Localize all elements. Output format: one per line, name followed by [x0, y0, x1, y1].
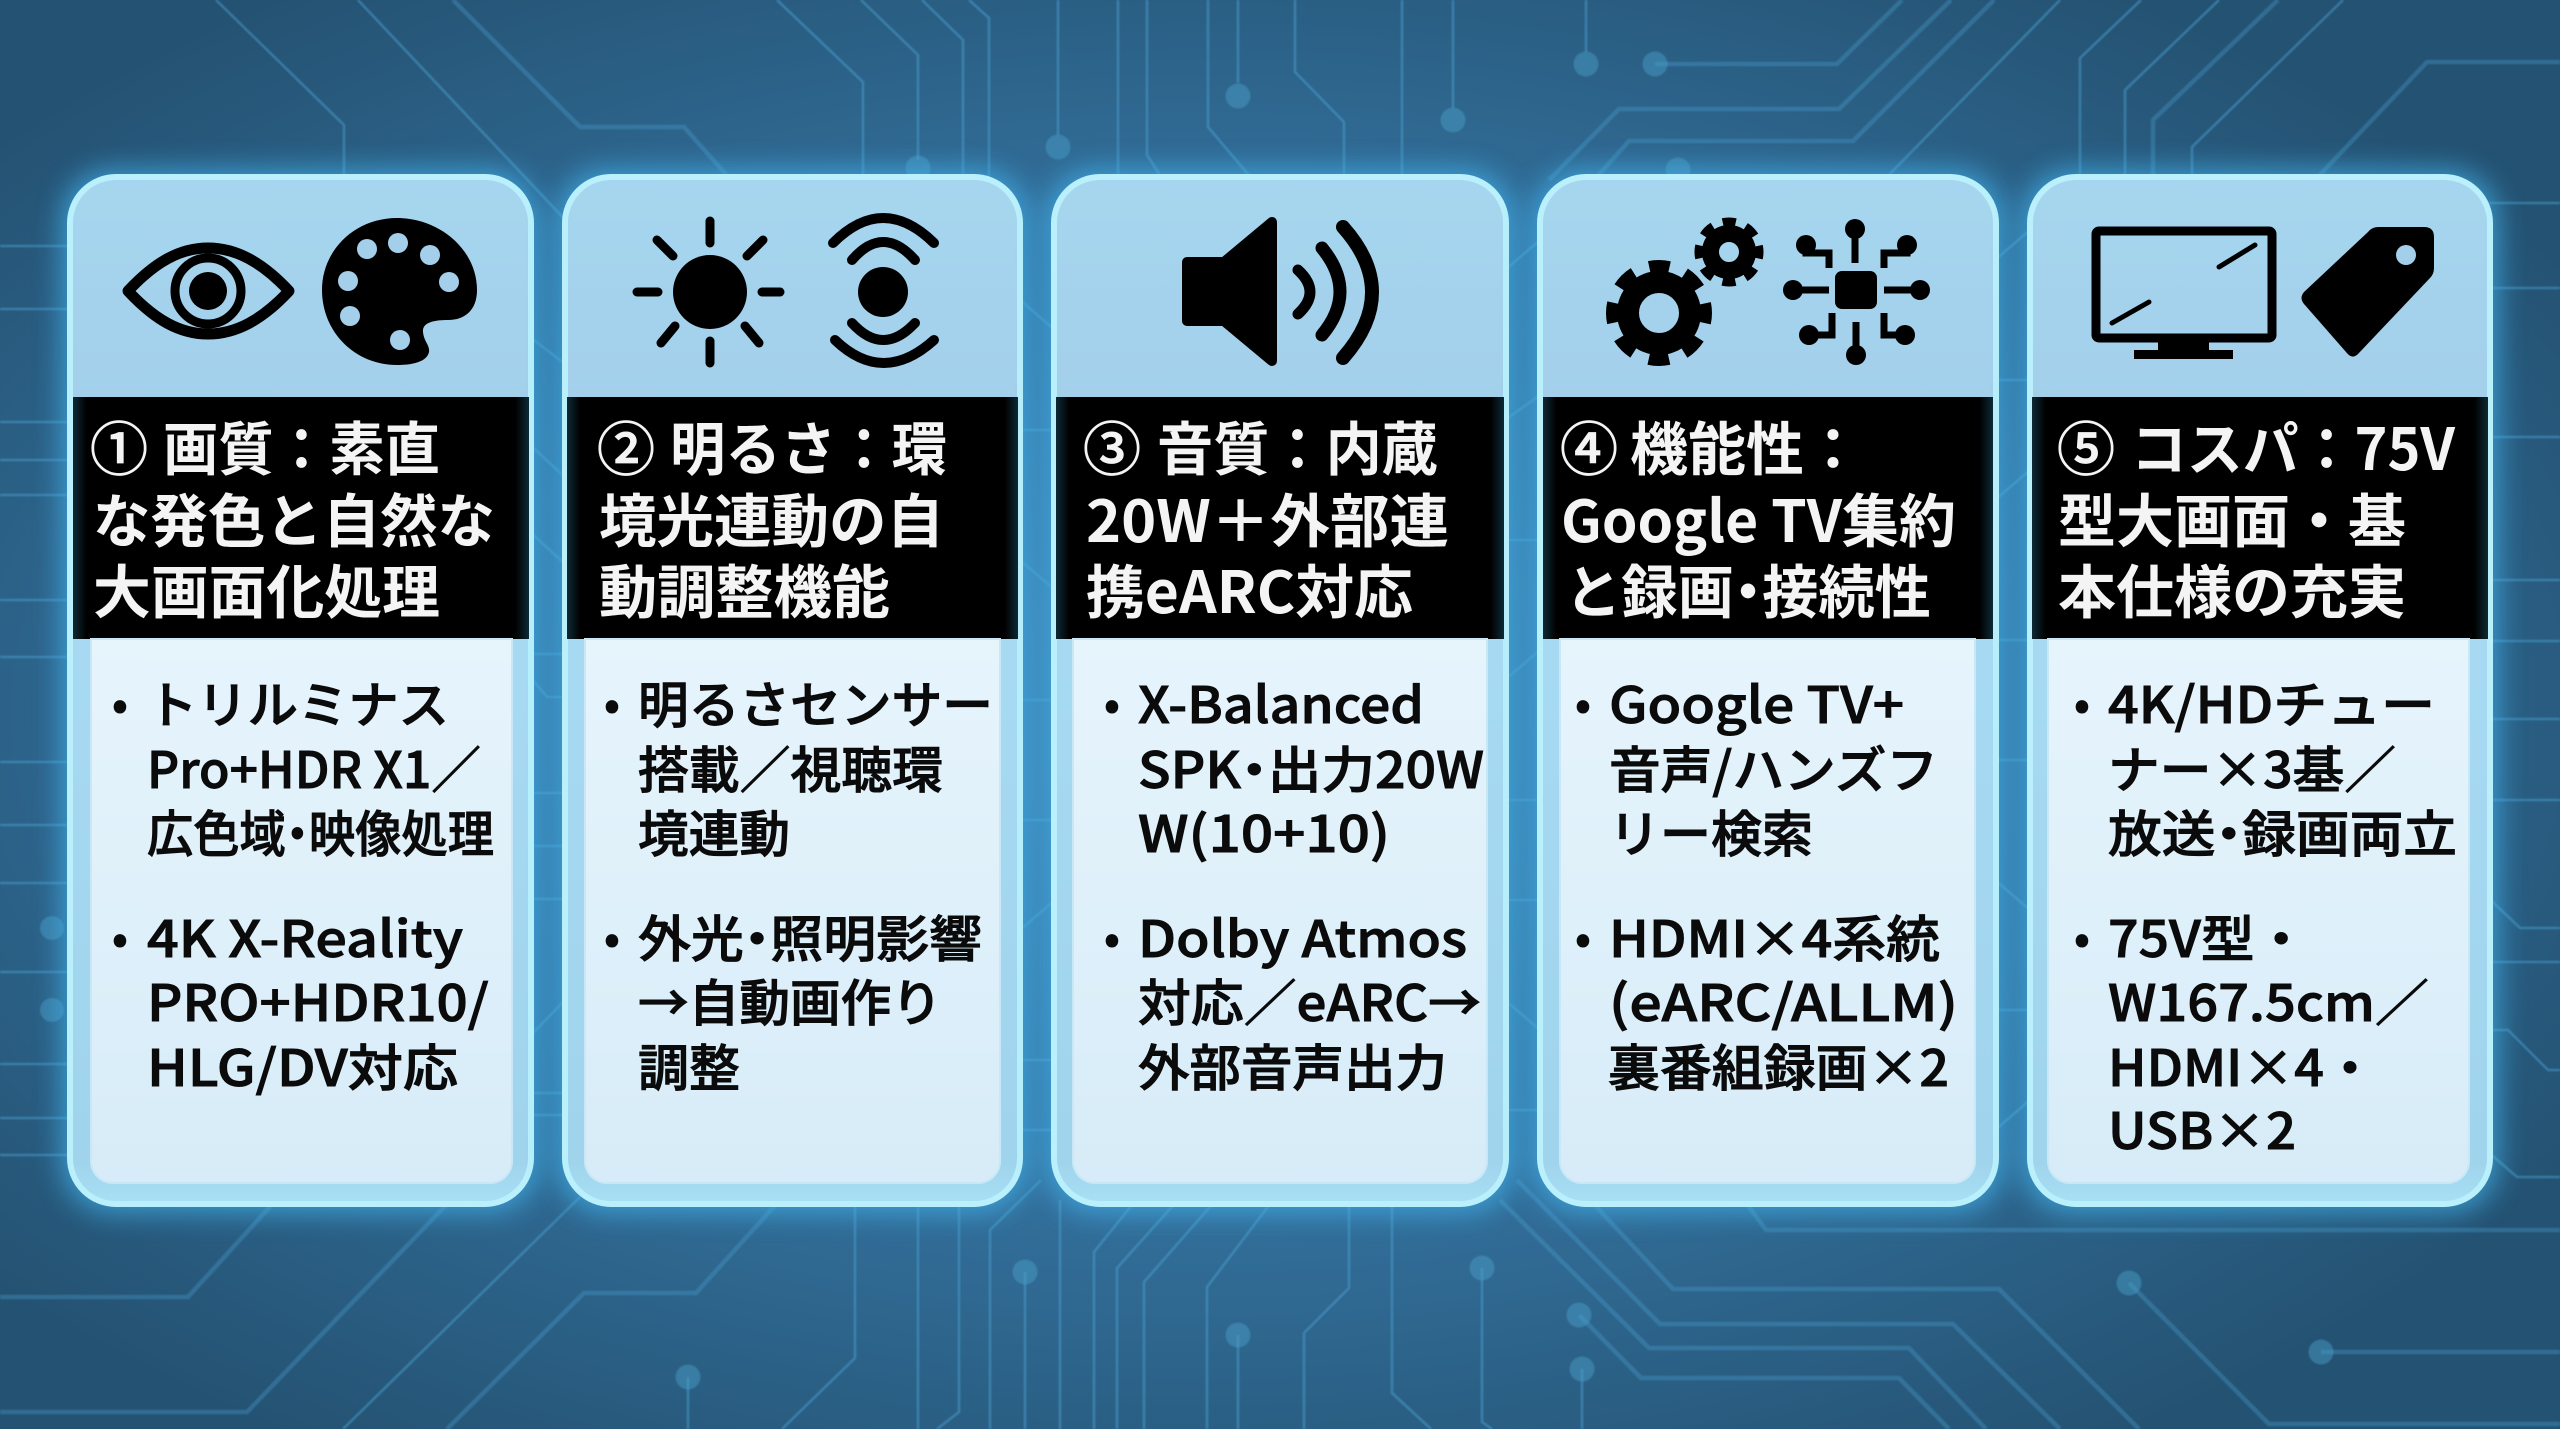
- text panel: HLG/DV対応: [147, 1029, 458, 1101]
- text panel: 広色域・映像処理: [147, 795, 494, 867]
- text panel: 音声/ハンズフ: [1609, 731, 1938, 803]
- heading band: [2032, 397, 2488, 639]
- heading band: 明るさ：環: [670, 403, 947, 487]
- heading band: ①: [90, 403, 148, 487]
- text panel: 外部音声出力: [1138, 1029, 1447, 1101]
- text panel: •: [112, 903, 128, 967]
- text panel: SPK・出力20W: [1138, 731, 1484, 803]
- icon: palette: [322, 218, 477, 365]
- heading band: ⑤: [2057, 403, 2115, 487]
- text panel: [2048, 639, 2469, 1183]
- heading band: 20W＋外部連: [1086, 475, 1449, 559]
- icon: network chip: [1783, 219, 1930, 365]
- heading band: ④: [1560, 403, 1618, 487]
- heading band: ②: [597, 403, 655, 487]
- text panel: •: [604, 669, 620, 733]
- text panel: [91, 639, 512, 1183]
- text panel: •: [1104, 669, 1120, 733]
- text panel: 4K X-Reality: [147, 900, 463, 972]
- text panel: Pro+HDR X1／: [147, 731, 481, 803]
- heading band: Google TV集約: [1561, 475, 1956, 559]
- panel: 1 picture quality: [62, 170, 539, 1212]
- panel: 3 sound: [1046, 170, 1514, 1212]
- icon: sun: [637, 221, 780, 363]
- heading band: コスパ：75V: [2131, 403, 2456, 487]
- panel: 4 functionality: [1532, 170, 2004, 1212]
- heading band: 画質：素直: [163, 403, 440, 487]
- text panel: •: [2074, 903, 2090, 967]
- text panel: 裏番組録画×2: [1608, 1029, 1949, 1101]
- text panel: (eARC/ALLM): [1609, 964, 1958, 1036]
- text panel: 放送・録画両立: [2108, 795, 2457, 867]
- text panel: 搭載／視聴環: [638, 731, 943, 803]
- heading band: 型大画面・基: [2058, 475, 2406, 559]
- icon: eye: [128, 248, 289, 334]
- panel: 2 brightness: [557, 170, 1028, 1212]
- text panel: [1073, 639, 1487, 1183]
- heading band: 音質：内蔵: [1157, 403, 1438, 487]
- text panel: 対応／eARC→: [1138, 964, 1481, 1036]
- text panel: •: [2074, 669, 2090, 733]
- text panel: W(10+10): [1138, 795, 1390, 867]
- text panel: [585, 639, 1000, 1183]
- text panel: USB×2: [2108, 1092, 2296, 1164]
- icon: ambient sensor: [833, 218, 934, 363]
- heading band: 境光連動の自: [599, 475, 944, 559]
- icon: television: [2096, 231, 2272, 359]
- text panel: •: [1104, 903, 1120, 967]
- icon: price tag: [2302, 227, 2434, 357]
- text panel: PRO+HDR10/: [147, 964, 489, 1036]
- text panel: 調整: [638, 1029, 740, 1101]
- text panel: •: [112, 669, 128, 733]
- text panel: 明るさセンサー: [638, 666, 993, 738]
- icon: gears: [1613, 222, 1759, 359]
- text panel: リー検索: [1609, 795, 1813, 867]
- text panel: HDMI×4・: [2108, 1029, 2376, 1101]
- heading band: 本仕様の充実: [2058, 546, 2406, 630]
- text panel: [1560, 639, 1975, 1183]
- text panel: •: [1575, 669, 1591, 733]
- heading band: と録画・接続性: [1565, 546, 1931, 630]
- text panel: Google TV+: [1609, 666, 1904, 738]
- heading band: 大画面化処理: [93, 546, 440, 630]
- text panel: W167.5cm／: [2108, 964, 2429, 1036]
- heading band: 機能性：: [1630, 403, 1862, 487]
- text panel: 境連動: [638, 795, 790, 867]
- panel: 5 value: [2022, 170, 2498, 1212]
- text panel: •: [604, 903, 620, 967]
- icon: speaker: [1187, 222, 1372, 361]
- heading band: ③: [1083, 403, 1141, 487]
- text panel: Dolby Atmos: [1138, 900, 1467, 972]
- text panel: X-Balanced: [1138, 666, 1424, 738]
- text panel: トリルミナス: [147, 666, 449, 738]
- text panel: 4K/HDチュー: [2108, 666, 2435, 738]
- heading band: 動調整機能: [599, 546, 890, 630]
- heading band: 携eARC対応: [1086, 546, 1413, 630]
- heading band: [73, 397, 529, 639]
- text panel: 外光・照明影響: [638, 900, 982, 972]
- text panel: •: [1575, 903, 1591, 967]
- heading band: [567, 397, 1018, 639]
- text panel: 75V型・: [2108, 900, 2308, 972]
- text panel: HDMI×4系統: [1609, 900, 1940, 972]
- text panel: ナー×3基／: [2108, 731, 2396, 803]
- heading band: [1543, 397, 1993, 639]
- text panel: →自動画作り: [638, 964, 942, 1036]
- heading band: な発色と自然な: [93, 475, 495, 559]
- heading band: [1056, 397, 1504, 639]
